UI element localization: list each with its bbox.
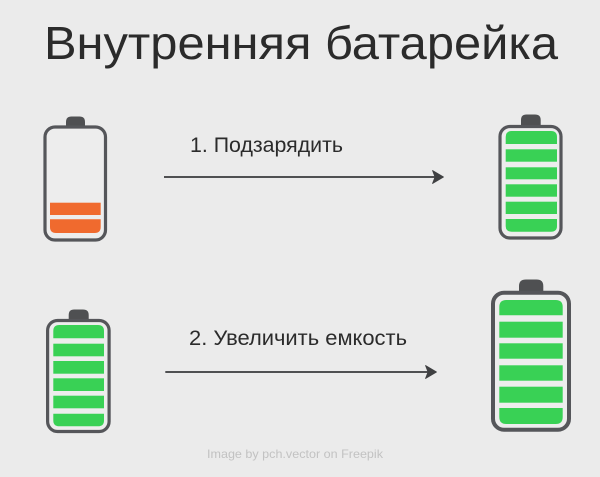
step 2 label: 2. Увеличить емкость xyxy=(189,327,407,350)
arrow: step 1 xyxy=(164,170,444,184)
image credit: Image by pch.vector on Freepik xyxy=(207,447,384,461)
icon: low battery, orange xyxy=(45,116,106,240)
icon: larger capacity battery, green xyxy=(493,280,569,430)
icon: charged battery, green xyxy=(500,114,561,238)
icon: full battery, green xyxy=(48,310,109,432)
arrow: step 2 xyxy=(165,366,437,378)
title: Внутренняя батарейка xyxy=(44,17,558,69)
step 1 label: 1. Подзарядить xyxy=(190,134,343,157)
